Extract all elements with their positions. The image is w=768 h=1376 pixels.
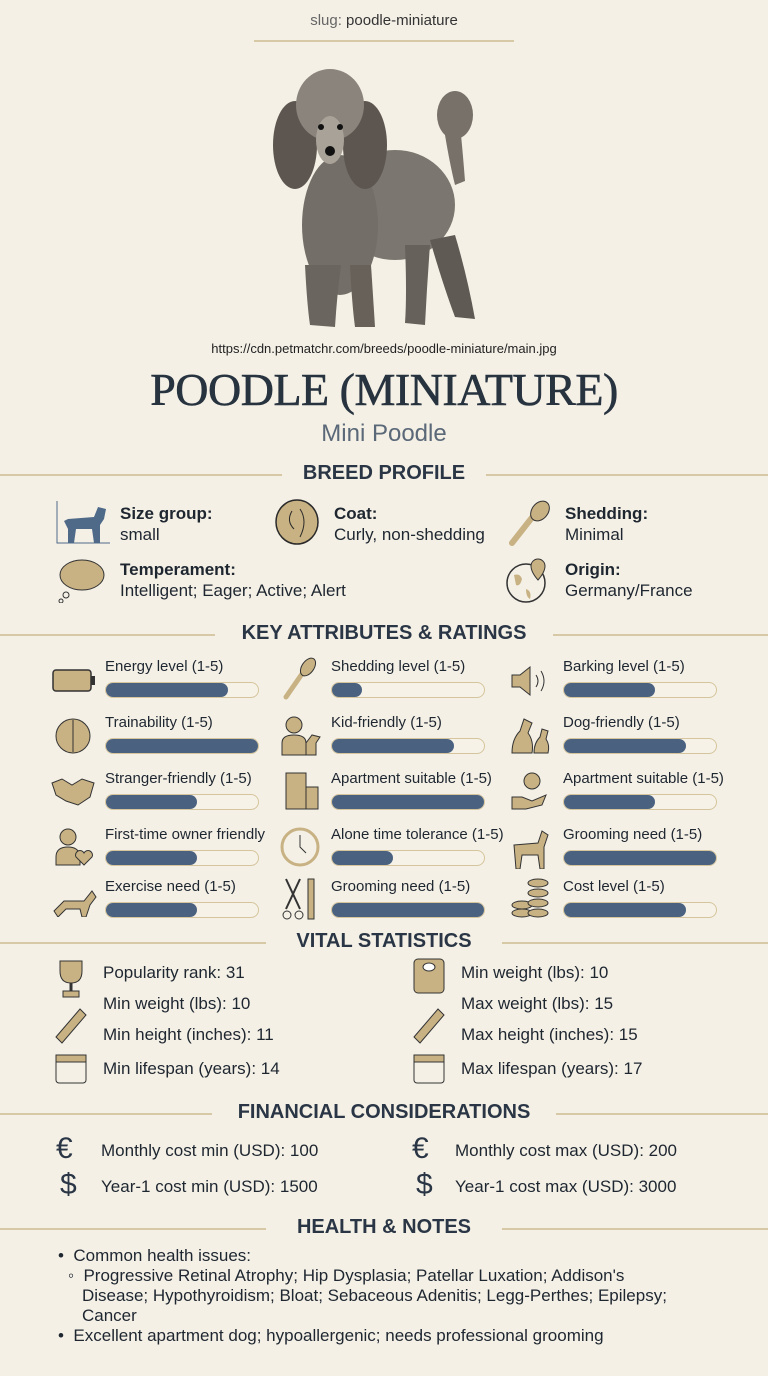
icon: ruler (55, 1008, 87, 1044)
icon: calendar (56, 1054, 86, 1084)
title: POODLE (MINIATURE) (150, 364, 618, 415)
heading: key attributes: KEY ATTRIBUTES & RATINGS (242, 622, 526, 644)
rating: exercise (53, 878, 259, 918)
dog image (273, 69, 475, 327)
panel: financial (56, 1132, 677, 1201)
rating: grooming need: Grooming need (1-5) (563, 826, 702, 843)
rating: grooming 2 (282, 878, 485, 920)
panel: vital statistics: Popularity rank: 31 (103, 963, 245, 982)
rating: alone time: Alone time tolerance (1-5) (331, 826, 504, 843)
rating: cost: Cost level (1-5) (563, 878, 665, 895)
rating: grooming need (514, 826, 717, 869)
rating: apartment 2 (512, 770, 724, 810)
rating: apartment: Apartment suitable (1-5) (331, 770, 492, 787)
panel: vital statistics: Max lifespan (years): 17 (461, 1059, 642, 1078)
panel: vital statistics: Min height (inches): 11 (103, 1025, 274, 1044)
panel: financial: $ (60, 1168, 77, 1201)
rating: energy (52, 658, 259, 698)
rating: alone time (280, 826, 504, 866)
panel: vital statistics: Min weight (lbs): 10 (461, 963, 608, 982)
panel: financial: Monthly cost max (USD): 200 (455, 1141, 677, 1160)
icon: globe (506, 558, 546, 603)
rating: barking (512, 658, 717, 698)
rating: stranger friendly: Stranger-friendly (1-5) (105, 770, 252, 787)
panel: financial: Monthly cost min (USD): 100 (101, 1141, 318, 1160)
icon: scale (414, 958, 444, 994)
rating: shedding (284, 658, 485, 700)
heading: vital statistics: VITAL STATISTICS (296, 930, 472, 952)
panel: financial: $ (416, 1168, 433, 1201)
rating: energy: Energy level (1-5) (105, 658, 223, 675)
icon: coat (275, 499, 319, 545)
panel: breed profile: Curly, non-shedding (334, 525, 485, 544)
rating: kid friendly: Kid-friendly (1-5) (331, 714, 442, 731)
icon: calendar 2 (414, 1054, 444, 1084)
rating: first-time owner (56, 826, 265, 866)
panel: breed profile (56, 499, 693, 603)
rating: stranger friendly (51, 770, 259, 810)
panel: breed profile: Size group: (120, 504, 213, 523)
panel: ratings (51, 658, 724, 920)
heading: breed profile: BREED PROFILE (303, 462, 465, 484)
rating: grooming 2: Grooming need (1-5) (331, 878, 470, 895)
icon: brush (509, 500, 550, 546)
heading: financial: FINANCIAL CONSIDERATIONS (238, 1101, 530, 1123)
rating: dog friendly: Dog-friendly (1-5) (563, 714, 680, 731)
rating: trainability: Trainability (1-5) (105, 714, 213, 731)
rating: first-time owner: First-time owner friendly (105, 826, 265, 843)
rating: shedding: Shedding level (1-5) (331, 658, 465, 675)
panel: financial: € (412, 1132, 429, 1165)
icon: ruler 2 (413, 1008, 445, 1044)
panel: health notes: ◦ Progressive Retinal Atrophy; Hip Dysplasia; Patellar Luxation; Addison's Disease; Hypothyroidism; Bloat; Sebaceous Adenitis; Legg-Perthes; Epilepsy; Cancer (68, 1266, 667, 1325)
icon: thought cloud (58, 560, 104, 603)
panel: health notes: • Common health issues: (58, 1246, 251, 1265)
panel: vital statistics: Max height (inches): 15 (461, 1025, 638, 1044)
panel: breed profile: Intelligent; Eager; Active; Alert (120, 581, 346, 600)
slug: slug: poodle-miniature (310, 12, 458, 29)
icon: size dog (56, 501, 110, 544)
rating: barking: Barking level (1-5) (563, 658, 685, 675)
panel: breed profile: Origin: (565, 560, 621, 579)
panel: health notes: • Excellent apartment dog; hypoallergenic; needs professional grooming (58, 1326, 604, 1345)
rating: apartment 2: Apartment suitable (1-5) (563, 770, 724, 787)
rating: trainability (56, 714, 259, 754)
rating: apartment (286, 770, 492, 810)
panel: financial: € (56, 1132, 73, 1165)
panel: breed profile: Minimal (565, 525, 624, 544)
panel: breed profile: Shedding: (565, 504, 648, 523)
panel: vital statistics (55, 958, 642, 1084)
rating: dog friendly (512, 714, 717, 754)
subtitle: Mini Poodle (321, 420, 447, 447)
rating: kid friendly (282, 714, 485, 756)
heading: health: HEALTH & NOTES (297, 1216, 471, 1238)
image url: https://cdn.petmatchr.com/breeds/poodle-miniature/main.jpg (211, 341, 557, 356)
panel: health notes (58, 1246, 667, 1345)
panel: breed profile: Temperament: (120, 560, 236, 579)
icon: trophy (60, 960, 82, 998)
rating: cost (512, 878, 717, 918)
panel: financial: Year-1 cost max (USD): 3000 (455, 1177, 676, 1196)
rating: exercise: Exercise need (1-5) (105, 878, 236, 895)
panel: breed profile: Coat: (334, 504, 377, 523)
panel: breed profile: small (120, 525, 160, 544)
panel: vital statistics: Min lifespan (years): 14 (103, 1059, 280, 1078)
panel: breed profile: Germany/France (565, 581, 693, 600)
panel: vital statistics: Max weight (lbs): 15 (461, 994, 613, 1013)
panel: vital statistics: Min weight (lbs): 10 (103, 994, 250, 1013)
panel: financial: Year-1 cost min (USD): 1500 (101, 1177, 318, 1196)
